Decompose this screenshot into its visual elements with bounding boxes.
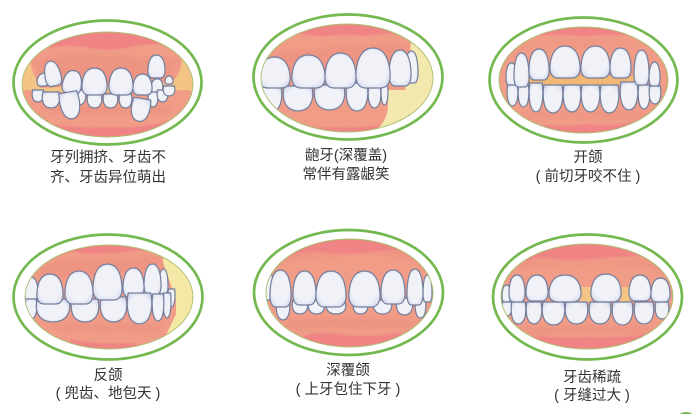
upper teeth	[502, 274, 670, 302]
caption	[296, 362, 400, 398]
illustration: crowded teeth mouth	[20, 30, 195, 140]
caption	[50, 149, 166, 186]
lower teeth	[507, 82, 661, 113]
orange gap	[528, 76, 634, 86]
back teeth	[32, 71, 175, 108]
illustration: deep overbite mouth	[262, 237, 435, 349]
caption: 龅牙(深覆盖)	[305, 147, 387, 164]
caption	[56, 367, 160, 402]
caption	[302, 147, 390, 183]
caption: 牙列拥挤、牙齿不	[50, 149, 166, 166]
panel: gapped teeth	[493, 234, 682, 404]
oval frame	[14, 234, 202, 360]
upper teeth	[262, 269, 432, 307]
lower teeth	[502, 302, 669, 325]
caption: 反颌	[94, 367, 122, 384]
upper teeth	[259, 48, 418, 88]
upper front teeth	[42, 55, 165, 95]
caption	[554, 369, 630, 404]
caption: 开颌	[574, 149, 602, 166]
panel: underbite	[14, 234, 202, 402]
crooked lower teeth	[58, 91, 152, 123]
caption: ( 兜齿、地包天 )	[56, 384, 160, 402]
lower teeth	[25, 289, 175, 324]
oval frame	[254, 14, 442, 140]
caption	[536, 149, 640, 185]
caption: 牙齿稀疏	[563, 369, 621, 386]
lower teeth	[259, 83, 388, 112]
lower teeth	[276, 298, 426, 320]
caption: ( 上牙包住下牙 )	[296, 381, 400, 398]
caption: 齐、牙齿异位萌出	[50, 169, 166, 186]
caption: 深覆颌	[326, 362, 370, 379]
oval frame	[490, 18, 678, 142]
illustration: open bite mouth	[495, 25, 673, 135]
upper teeth	[506, 46, 660, 87]
oval frame	[14, 20, 202, 144]
illustration: buck teeth mouth	[262, 24, 432, 132]
panel: deep overbite	[254, 230, 443, 398]
oval frame	[493, 234, 682, 360]
orange gaps	[580, 287, 630, 302]
panel: open bite	[490, 18, 678, 185]
panel: crowded teeth	[14, 20, 202, 186]
caption: ( 牙缝过大 )	[554, 387, 630, 404]
caption: ( 前切牙咬不住 )	[536, 167, 640, 185]
upper front teeth	[37, 264, 122, 304]
illustration: underbite mouth	[26, 246, 192, 348]
illustration: gapped teeth mouth	[499, 242, 675, 352]
upper teeth	[24, 264, 168, 300]
caption: 常伴有露龈笑	[302, 166, 390, 183]
panel: buck teeth	[254, 14, 442, 183]
oval frame	[254, 230, 443, 355]
